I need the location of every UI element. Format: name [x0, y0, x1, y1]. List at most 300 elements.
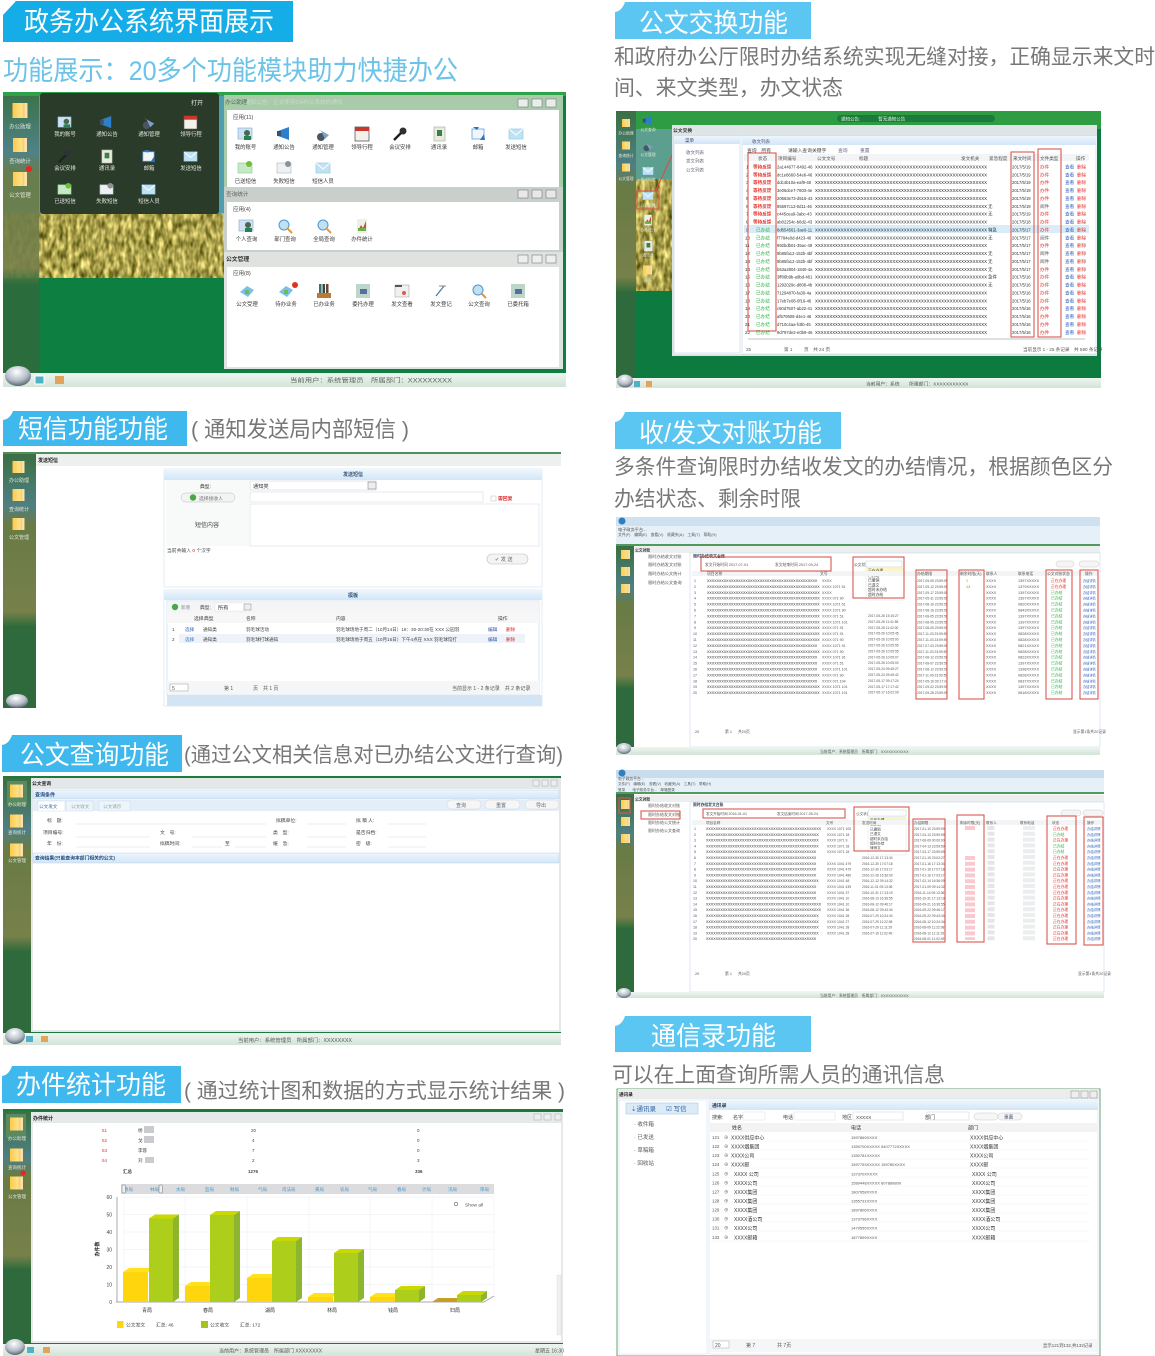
- contact table: 1479555XXXX: [851, 1226, 878, 1231]
- table: 对账: 办结详情: [1083, 619, 1097, 624]
- table: 对账: 2016-09-22 09:43:34: [914, 914, 945, 918]
- table: 对账: 2017-08-16 23:59:59: [917, 603, 948, 607]
- dropdown: 已办结: [868, 573, 880, 578]
- table: 对账: 2017-01-10 23:59:59: [914, 827, 945, 831]
- table: 对账: 17: [693, 920, 697, 924]
- table: 对账: XXXXXXXXXXXXXXXXXXXXXXXXXXXXXXXXXXXXXXXXXXXXXXXX: [706, 908, 822, 912]
- table: 收文列表: 查看: [1065, 258, 1075, 265]
- text block: 公文交换说明: 间、来文类型，办文状态: [614, 77, 843, 100]
- text block: 公文交换说明: 和政府办公厅限时办结系统实现无缝对接，正确显示来文时: [614, 46, 1155, 69]
- table: 对账: XXXX 1041 28: [827, 926, 849, 930]
- table: 对账: XXXX 1041 479: [827, 868, 851, 872]
- table: 对账: 2016-12-30 17:03:17: [862, 868, 893, 872]
- dropdown: 已撤销: [868, 578, 880, 583]
- panel: 收发文对账 screenshot 2: 限时办结发文台账: [693, 802, 724, 807]
- table: 对账: 正在办理: [1053, 896, 1068, 901]
- red highlight boxes: [701, 557, 1098, 699]
- data table: [102, 1127, 423, 1175]
- contact table: ⊕: [724, 1217, 728, 1222]
- table: 对账: XXXX: [986, 644, 997, 648]
- window: 公文交换: 操作: [1076, 155, 1086, 162]
- taskbar: [3, 366, 566, 387]
- query form: 文 号:: [160, 829, 176, 836]
- table: 收文列表: 已办结: [756, 226, 770, 234]
- 3D bar chart: Show all: [465, 1202, 483, 1208]
- 3D bar chart: 妇局: [450, 1307, 460, 1314]
- table: 对账: 办结详情: [1087, 901, 1101, 906]
- table: 收文列表: 阅件: [1040, 234, 1050, 241]
- dropdown: 正在办理: [870, 817, 885, 822]
- table: 收文列表: 查看: [1065, 250, 1075, 257]
- table: 对账: 办结详情: [1087, 936, 1101, 941]
- table: 收文列表: 删除: [1077, 282, 1087, 289]
- contact table: ⊕: [724, 1135, 728, 1140]
- sidebar and desktop icons: 邮箱: [644, 278, 652, 282]
- table: 收文列表: 查看: [1065, 171, 1075, 178]
- contact table: 第 7: [746, 1342, 755, 1349]
- table: 收文列表: 删除: [1077, 171, 1087, 178]
- table: 收文列表: [745, 164, 1087, 336]
- table: 对账: 已办结: [1051, 590, 1063, 595]
- table: 对账: XXXXXXXXXXXXXXXXXXXXXXXXXXXXXXXXXXXXXXXXXXXXXXX: [707, 691, 820, 695]
- table: 对账: 11: [693, 638, 697, 642]
- panel: 收发文对账 screenshot 2: 公文对账: [635, 796, 650, 802]
- window: 公文管理: 公文管理: [226, 255, 249, 263]
- window: 办公助理: 邮箱: [473, 143, 484, 151]
- table: 对账: 0843XXXXX: [1018, 608, 1040, 612]
- table: 收文列表: 已办结: [756, 305, 770, 312]
- contact table: 电话: [851, 1124, 861, 1132]
- table: 对账: 已办结: [1051, 678, 1063, 683]
- panel: 收发文对账 screenshot 2: 操作: [1087, 820, 1095, 825]
- contact table: XXXXX: [856, 1115, 871, 1120]
- table: 对账: XXXXXXXXXXXXXXXXXXXXXXXXXXXXXXXXXXXXXXXXXXXXXXX: [707, 603, 820, 607]
- table: 对账: 办结详情: [1083, 625, 1097, 630]
- table: 收文列表: 9: [746, 227, 749, 232]
- form: 发送短信: 发送短信: [343, 471, 363, 478]
- contact table: XXXX供应中心: [970, 1134, 1003, 1142]
- table: 收文列表: XXXXXXXXXXXXXXXXXXXXXXXXXXXXXXXXXXXXXXXXXXXXXXXXXXXXXXXXXXXX: [815, 180, 987, 185]
- table: 对账: 2017-08-12 23:59:59: [917, 656, 948, 660]
- table: 对账: 正在办理: [1053, 925, 1068, 930]
- table: 模板: 新增: [181, 604, 190, 611]
- window: 查询统计: 部门查询: [274, 235, 296, 243]
- contact table: ⊕: [724, 1198, 728, 1203]
- table: 对账: 2017-05-26 11:42:00: [868, 626, 899, 630]
- table: 收文列表: 9d797de2-e0b9-46: [777, 330, 813, 335]
- panel: 短信 screenshot: [3, 452, 561, 708]
- table: 收文列表: 查看: [1065, 313, 1075, 320]
- table: 收文列表: 2017/5/16: [1012, 290, 1031, 295]
- table: 收文列表: 删除: [1077, 226, 1087, 233]
- form: 发送短信: ✔ 发 送: [495, 555, 513, 563]
- left menu: · 收件箱: [634, 1120, 654, 1128]
- filter row: 公文状态: [854, 562, 869, 567]
- contact table: 125: [712, 1171, 720, 1176]
- table: 收文列表: 已办结: [756, 250, 770, 257]
- table: 对账: 2017-05-17 16:02:09: [868, 691, 899, 695]
- panel: 收发文对账 screenshot 2: 剩余时限(天): [960, 820, 980, 825]
- panel: 收发文对账 screenshot 1: 操作: [1085, 571, 1093, 576]
- dropdown: 超时办结: [868, 592, 883, 597]
- table: 收文列表: 办件: [1040, 195, 1050, 202]
- contact table: ⊕: [724, 1144, 728, 1149]
- data table: 李蓉: [138, 1147, 147, 1154]
- panel: 公文交换 screenshot: 通知公告: 暂无通知公告: [841, 116, 906, 122]
- table: 对账: 8: [694, 620, 696, 624]
- table: 对账: XXXXXXXXXXXXXXXXXXXXXXXXXXXXXXXXXXXXXXXXXXXXXXX: [707, 614, 820, 618]
- table: 对账: 2016-12-26 16:36:09: [862, 873, 893, 877]
- table: 对账: 2017-08-07 23:59:59: [917, 662, 948, 666]
- table: 收文列表: 已办结: [756, 234, 770, 241]
- table: 收文列表: 20: [745, 314, 751, 319]
- table: 对账: 2017-01-19 23:02:27: [914, 856, 945, 860]
- range selector: 农局: [340, 1186, 349, 1193]
- sidebar: 办公助理 查询统计 公文管理: 公文管理: [9, 191, 31, 199]
- query form: 拟稿单位:: [276, 817, 297, 824]
- filter row: 发文开始时间 2016-01-01: [706, 811, 747, 816]
- dropdown: [866, 568, 904, 600]
- panel: 收发文对账 screenshot 2: 20: [695, 972, 699, 976]
- table: 对账: 2017-05-26 11:41:55: [868, 620, 899, 624]
- data table: 53: [102, 1148, 108, 1153]
- table: 对账: XXXX: [986, 650, 997, 654]
- menu: [648, 553, 682, 586]
- window: 公文交换: 标题: [859, 155, 869, 162]
- table: 对账: XXXX 1041 27: [827, 920, 849, 924]
- table: 对账: XXXX 071 91: [822, 632, 844, 636]
- table: 对账: 已办结: [1051, 690, 1063, 695]
- table: 收文列表: 3e06dce7-7803-4e: [777, 188, 813, 193]
- window: 公文查询: 查询: [456, 802, 466, 809]
- table: 对账: XXXXXXXXXXXXXXXXXXXXXXXXXXXXXXXXXXXXXXXXXXXXXXX: [707, 591, 820, 595]
- table: 收文列表: 办件: [1040, 226, 1050, 233]
- table: 收文列表: 查看: [1065, 329, 1075, 336]
- panel: 收发文对账 screenshot 1: 第 1: [725, 729, 732, 734]
- table: 模板: 编辑: [488, 626, 498, 633]
- 3D bar chart: 湖局: [265, 1307, 275, 1314]
- contact table: ⊕: [724, 1208, 728, 1213]
- table: 对账: XXXX 1071 101: [822, 691, 848, 695]
- table: 对账: XXXXXXXXXXXXXXXXXXXXXXXXXXXXXXXXXXXXXXXXXXXXXX: [707, 644, 818, 648]
- table: 收文列表: c60d7507-ab22-41: [777, 306, 813, 311]
- table: 收文列表: 查看: [1065, 242, 1075, 249]
- contact table: 部门: [968, 1124, 978, 1132]
- flyout: application menu: 我的账号: [54, 130, 76, 138]
- table: 对账: 1397XXXXX: [1018, 620, 1040, 624]
- table: 对账: 办结详情: [1087, 872, 1101, 877]
- table: 对账: XXXXXXXXXXXXXXXXXXXXXXXXXXXXXXXXXXXXXXXXXXXXXXX: [706, 920, 819, 924]
- table: 收文列表: ab02254c-b8d2-43: [777, 220, 813, 225]
- contact table: XXXX邮箱: [972, 1234, 995, 1241]
- panel: 收发文对账 screenshot 2: 项目名称: [706, 820, 721, 825]
- table: 收文列表: 2017/5/17: [1012, 235, 1031, 240]
- table: 对账: 正在办理: [1053, 878, 1068, 883]
- data table: 54: [102, 1158, 108, 1163]
- table: 对账: 18: [693, 679, 697, 683]
- sidebar: 办公助理: [9, 477, 29, 484]
- table: 对账: XXXX: [986, 632, 997, 636]
- taskbar: [616, 374, 1101, 388]
- contact table: ⊕: [724, 1235, 728, 1240]
- table: 收文列表: dc1e6660-54e6-46: [777, 172, 813, 177]
- table: 对账: XXXX 1071 18: [827, 833, 849, 837]
- table: 收文列表: 查看: [1065, 234, 1075, 241]
- contact table: 名字: [733, 1114, 743, 1121]
- panel: 收发文对账 screenshot 1: [616, 517, 1106, 755]
- table: 对账: XXXX: [986, 579, 997, 583]
- heading: 公文查询功能: 公文查询功能: [20, 740, 169, 770]
- table: 收文列表: XXXXXXXXXXXXXXXXXXXXXXXXXXXXXXXXXXXXXXXXXXXXXXXXXXXXXXXXXXXX 无: [815, 235, 993, 241]
- contact table: ⊕: [724, 1226, 728, 1231]
- table: 对账: 2: [694, 585, 696, 589]
- text block: 公文交换说明: [614, 46, 1155, 100]
- caption: 办件统计: ( 通过统计图和数据的方式显示统计结果 ): [184, 1080, 565, 1103]
- table: 收文列表: 删除: [1077, 313, 1087, 320]
- table: 收文列表: 办件: [1040, 289, 1050, 296]
- table: 对账: XXXX 071 90: [822, 650, 844, 654]
- table: 对账: 正在办理: [1053, 826, 1068, 831]
- contact table: 126: [712, 1180, 720, 1185]
- table: 收文列表: XXXXXXXXXXXXXXXXXXXXXXXXXXXXXXXXXXXXXXXXXXXXXXXXXXXXXXXXXXXX: [815, 243, 987, 248]
- contact table: 显示121到132,共132记录: [1043, 1342, 1093, 1349]
- table: 模板: 模板: [348, 592, 358, 599]
- table: 对账: 6: [694, 608, 696, 612]
- window: 公文查询: 公文收文: [71, 803, 90, 810]
- table: 收文列表: 删除: [1077, 274, 1087, 281]
- table: 对账: 1397XXXXX: [1018, 591, 1040, 595]
- window: 公文管理: 已办业务: [313, 300, 335, 308]
- contact table: 1355731XXXX: [851, 1198, 878, 1203]
- table: 对账: XXXXXXXXXXXXXXXXXXXXXXXXXXXXXXXXXXXXXXXXXXXXXXX: [706, 914, 819, 918]
- menu: [648, 802, 680, 833]
- table: 对账: 2017-02-14 16:36:09: [914, 879, 945, 883]
- table: 收文列表: XXXXXXXXXXXXXXXXXXXXXXXXXXXXXXXXXXXXXXXXXXXXXXXXXXXXXXXXXXXX: [815, 298, 987, 303]
- table: 对账: 1379XXXXX: [1018, 585, 1040, 589]
- panel: 收发文对账 screenshot 1: 项目名称: [707, 571, 722, 576]
- table: 对账: 办结详情: [1083, 655, 1097, 660]
- bars: 公文发文: [123, 1268, 462, 1302]
- panel: 公文查询 screenshot: [3, 776, 561, 1045]
- browser chrome: 电子政务平台...: [618, 526, 647, 533]
- sidebar: 办公助理: [8, 801, 26, 808]
- flyout: application menu: 失败短信: [96, 197, 118, 205]
- table: 对账: XXXX: [986, 662, 997, 666]
- menu: 限时办结公文查询: [648, 827, 680, 833]
- legend: 公文发文: [126, 1322, 145, 1328]
- contact table: 1897806XXXX: [851, 1208, 878, 1213]
- table: 对账: 9: [694, 873, 696, 877]
- sidebar: 公文管理: [9, 534, 29, 541]
- sidebar: 办公助理 查询统计 公文管理: [9, 103, 32, 199]
- table: 模板: 编辑: [488, 636, 498, 643]
- table: 模板: 内容: [336, 615, 346, 622]
- table: 收文列表: XXXXXXXXXXXXXXXXXXXXXXXXXXXXXXXXXXXXXXXXXXXXXXXXXXXXXXXXXXXX 无: [815, 267, 993, 273]
- panel: 收发文对账 screenshot 2: 办结期限: [914, 820, 929, 825]
- table: 对账: 15: [693, 662, 697, 666]
- 3D bar chart: 办件数: [94, 1241, 101, 1257]
- table: 收文列表: 2017/5/17: [1012, 267, 1031, 272]
- range selector: 黄局: [315, 1186, 324, 1193]
- table: 对账: 0828XXXXX: [1018, 673, 1040, 677]
- table: 对账: 办结详情: [1087, 855, 1101, 860]
- sidebar: 查询统计: [8, 829, 26, 836]
- table: 收文列表: 6: [746, 204, 749, 209]
- table: 对账: 办结详情: [1083, 631, 1097, 636]
- panel: 收发文对账 screenshot 1: 显示第1条共20记录: [1073, 729, 1106, 734]
- filter row: 发文结束时间 2017-05-24: [777, 811, 818, 816]
- window: 公文查询: 重置: [496, 802, 506, 809]
- range selector: 监局: [205, 1186, 214, 1193]
- legend: 汇总: 172: [240, 1322, 261, 1328]
- table: 对账: 1397XXXXX: [1018, 597, 1040, 601]
- table: 对账: XXXX 1041 439: [827, 885, 851, 889]
- window: 公文查询: 查询条件: [35, 792, 55, 798]
- table: 收文列表: 8: [746, 220, 749, 225]
- contact table: 123: [712, 1153, 720, 1158]
- 3D bar chart: 20: [106, 1265, 112, 1271]
- table: 收文列表: 8d654561-3ae6-11: [777, 227, 813, 232]
- table: 对账: 16: [693, 914, 697, 918]
- table: 对账: XXXXXXXXXXXXXXXXXXXXXXXXXXXXXXXXXXXXXXXXXXXXXXX: [707, 585, 820, 589]
- dropdown: 已退文: [868, 582, 880, 587]
- table: 收文列表: 删除: [1077, 219, 1087, 226]
- window: 查询统计: 全局查询: [313, 235, 335, 243]
- table: 收文列表: 等待反馈: [753, 187, 772, 194]
- table: 对账: XXXX: [986, 668, 997, 672]
- taskbar: 当前用户：系统管理员 所属部门 XXXXXXXX: [219, 1348, 323, 1354]
- menu: 限时办结发文对账: [648, 811, 680, 817]
- contact table: XXXX邮: [970, 1162, 988, 1169]
- table: 对账: XXXXXXXXXXXXXXXXXXXXXXXXXXXXXXXXXXXXXXXXXXXXXXXX: [706, 827, 822, 831]
- window: 办公助理: 通知公告: [273, 143, 295, 151]
- sidebar and desktop icons: 公文查询: [640, 127, 656, 132]
- table: 对账: XXXXXXXXXXXXXXXXXXXXXXXXXXXXXXXXXXXXXXXXXXXXXXX: [706, 839, 819, 843]
- table: 对账: XXXX 1071 18: [827, 850, 849, 854]
- table: 对账: XXXX 1041 48: [827, 879, 849, 883]
- window: 公文管理: 发文查看: [391, 300, 413, 308]
- form: 发送短信: [164, 469, 542, 587]
- table: 对账: 已办结: [1053, 832, 1065, 837]
- table: 对账: 正在办理: [1051, 584, 1066, 589]
- contact table: 121: [712, 1135, 720, 1140]
- table: 对账: 2016-12-30 17:07:18: [862, 862, 893, 866]
- contact table: XXXX集团: [734, 1207, 757, 1214]
- table: 对账: XXXX: [986, 626, 997, 630]
- table: 对账: 16: [693, 668, 697, 672]
- table: 收文列表: 删除: [1077, 203, 1087, 210]
- window: 办公助理: 办公助理: [225, 98, 248, 106]
- table: 对账: XXXXXXXXXXXXXXXXXXXXXXXXXXXXXXXXXXXXXXXXXXXXXX: [707, 679, 818, 683]
- table: 收文列表: 删除: [1077, 250, 1087, 257]
- table: 收文列表: 2017/5/16: [1012, 322, 1031, 327]
- contact table: 127: [712, 1189, 720, 1194]
- table: 收文列表: 删除: [1077, 258, 1087, 265]
- data table: 4: [252, 1138, 255, 1143]
- sidebar: [7, 781, 27, 864]
- table: 对账: XXXXXXXXXXXXXXXXXXXXXXXXXXXXXXXXXXXXXXXXXXXXXX: [706, 856, 817, 860]
- window: 公文查询: 公文发文: [39, 803, 58, 810]
- table: 对账: XXXX 1071 101: [822, 668, 848, 672]
- table: 对账: 18: [693, 926, 697, 930]
- table: 对账: 5: [694, 603, 696, 607]
- table: 对账: 办结详情: [1087, 843, 1101, 848]
- table: 收文列表: 办件: [1040, 282, 1050, 289]
- table: 对账: 17: [693, 673, 697, 677]
- table: 收文列表: XXXXXXXXXXXXXXXXXXXXXXXXXXXXXXXXXXXXXXXXXXXXXXXXXXXXXXXXXXXX 急件: [815, 274, 997, 281]
- panel: 通讯录 screenshot: 通讯录: [619, 1091, 633, 1098]
- table: 对账: 10: [693, 879, 697, 883]
- table: 收文列表: 办件: [1040, 179, 1050, 186]
- table: 对账: 2016-07-29 10:24:34: [862, 914, 893, 918]
- table: 对账: 4: [694, 844, 696, 848]
- data table: 52: [102, 1138, 108, 1143]
- table: 收文列表: 10: [745, 235, 751, 240]
- table: 对账: XXXX 1041 28: [827, 914, 849, 918]
- table: 对账: 2017-01-09 09:14:32: [914, 885, 945, 889]
- heading: 短信功能功能: 短信功能功能: [18, 414, 168, 444]
- table: 对账: 已办结: [1051, 672, 1063, 677]
- table: 收文列表: 2017/5/19: [1012, 204, 1031, 209]
- range selector: 气局: [368, 1186, 377, 1193]
- left menu: [619, 1100, 707, 1354]
- table: 对账: 正在办理: [1053, 838, 1068, 843]
- panel: 收发文对账 screenshot 2: 状态: [1052, 820, 1060, 825]
- table: 对账: XXXX: [822, 579, 832, 583]
- table: 对账: XXXX 1041 480: [827, 873, 851, 877]
- table: 收文列表: 阅件: [1040, 203, 1050, 210]
- range selector: 春局: [397, 1186, 406, 1193]
- table: 对账: XXXXXXXXXXXXXXXXXXXXXXXXXXXXXXXXXXXXXXXXXXXXXX: [706, 868, 817, 872]
- menu: 限时办结公文统计: [648, 570, 682, 577]
- table: 对账: 2016-08-12 09:46:17: [862, 902, 893, 906]
- table: 模板: 1: [172, 627, 175, 632]
- contact table: XXXX公司: [970, 1154, 993, 1160]
- table: 对账: 2016-07-29 11:22:08: [862, 920, 893, 924]
- table: 收文列表: 删除: [1077, 266, 1087, 273]
- range selector: [121, 1184, 494, 1194]
- table: 收文列表: 查看: [1065, 305, 1075, 312]
- table: 对账: XXXXXXXXXXXXXXXXXXXXXXXXXXXXXXXXXXXXXXXXXXXXXX: [707, 656, 818, 660]
- table: 对账: 6: [694, 856, 696, 860]
- panel: 收发文对账 screenshot 1: 公文对账: [635, 548, 650, 552]
- panel: 收发文对账 screenshot 1: 剩余时限(天): [960, 571, 982, 576]
- contact table: 20: [715, 1343, 721, 1349]
- query form: 是否归档:: [356, 829, 377, 836]
- panel: 收发文对账 screenshot 1: 共20页: [738, 729, 750, 734]
- table: 对账: 办结详情: [1087, 867, 1101, 872]
- dropdown: 正在办理: [868, 568, 883, 573]
- panel: 办件统计 screenshot: [3, 1109, 564, 1356]
- table: 对账: 2017-11-03 23:59:59: [917, 650, 948, 654]
- window: 公文交换: 收文列表: [752, 138, 770, 145]
- table: 对账: XXXXXXXXXXXXXXXXXXXXXXXXXXXXXXXXXXXXXXXXXXXXXXXX: [706, 902, 822, 906]
- table: 对账: 2017-09-12 23:59:59: [917, 585, 948, 589]
- window: 公文交换: 来文时间: [1013, 155, 1032, 162]
- table: 模板: 羽毛球活动: [246, 626, 269, 633]
- table: 收文列表: 查看: [1065, 179, 1075, 186]
- panel: 收发文对账 screenshot 1: 文号: [820, 571, 828, 576]
- window: 公文查询: 公文请示: [103, 803, 122, 810]
- table: 收文列表: XXXXXXXXXXXXXXXXXXXXXXXXXXXXXXXXXXXXXXXXXXXXXXXXXXXXXXXXXXXX 无: [815, 204, 993, 210]
- table: 对账: 0828XXXXX: [1018, 632, 1040, 636]
- table: 收文列表: 11: [745, 243, 750, 248]
- left menu: · 草稿箱: [634, 1146, 654, 1154]
- contact table: 137370XXXXX: [851, 1171, 878, 1176]
- table: 对账: 2017-06-09 00:00:00: [914, 839, 945, 843]
- text block: 收发文说明: 多条件查询限时办结收发文的办结情况，根据颜色区分: [614, 456, 1113, 479]
- table: 收文列表: c445cea9-3abc-43: [777, 212, 812, 217]
